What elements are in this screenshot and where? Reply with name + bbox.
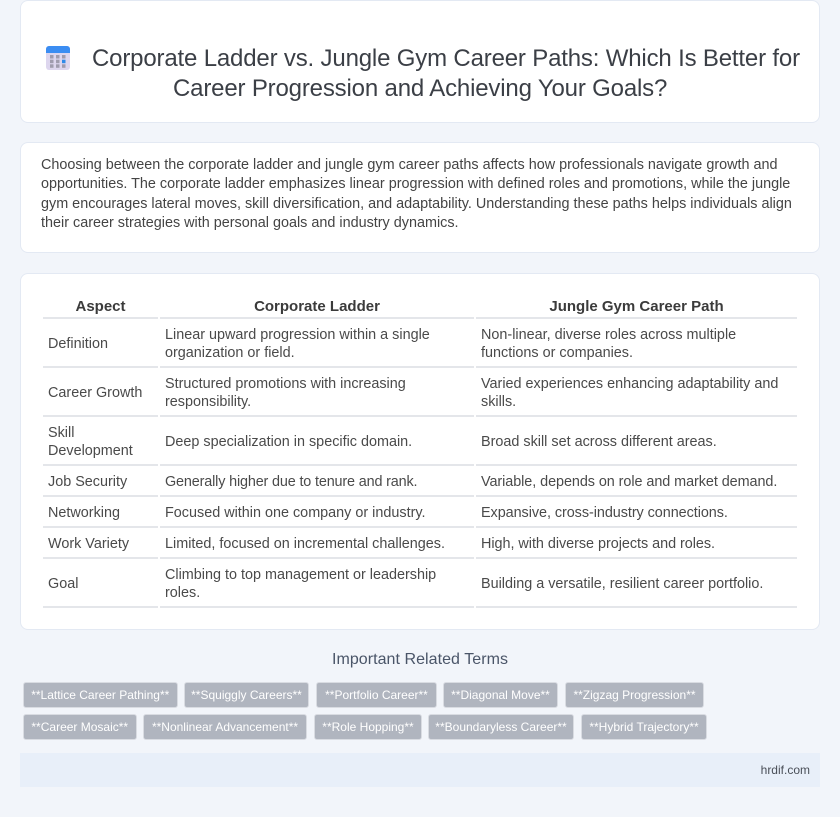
- intro text: opportunities. The corporate ladder emphasizes linear progression with defined roles and promotions, while the jungle: [41, 176, 790, 192]
- tag: **Boundaryless Career**: [435, 720, 567, 734]
- tag: **Zigzag Progression**: [573, 688, 696, 702]
- tag: [184, 682, 309, 708]
- row: definition: Definition: [48, 336, 108, 352]
- tag: **Nonlinear Advancement**: [152, 720, 298, 734]
- intro text: Choosing between the corporate ladder and jungle gym career paths affects how professionals navigate growth and: [41, 157, 778, 173]
- row: work variety: Work Variety: [48, 536, 129, 552]
- comparison table: Generally higher due to tenure and rank.: [165, 474, 417, 490]
- row: skill development: [48, 425, 133, 459]
- comparison table: Variable, depends on role and market demand.: [481, 474, 777, 490]
- tag: **Portfolio Career**: [325, 688, 428, 702]
- tag: **Squiggly Careers**: [191, 688, 302, 702]
- intro text: gym encourages lateral moves, skill diversification, and adaptability. Understanding these paths helps individuals align: [41, 196, 792, 212]
- row: career growth: Career Growth: [48, 385, 142, 401]
- tag: [316, 682, 437, 708]
- tag: [581, 714, 707, 740]
- intro text: [41, 157, 792, 231]
- tag: **Role Hopping**: [322, 720, 414, 734]
- comparison table: Limited, focused on incremental challenges.: [165, 536, 445, 552]
- comparison table: Structured promotions with increasing: [165, 376, 406, 392]
- comparison table: Non-linear, diverse roles across multiple: [481, 327, 736, 343]
- tag: **Hybrid Trajectory**: [589, 720, 699, 734]
- footer bar: [20, 753, 820, 787]
- tag: [428, 714, 574, 740]
- comparison table: organization or field.: [165, 345, 295, 361]
- row: skill development: Development: [48, 443, 133, 459]
- intro panel: [20, 142, 820, 253]
- comparison table: [43, 298, 797, 608]
- intro text: their career strategies with personal goals and industry dynamics.: [41, 215, 459, 231]
- title: [92, 45, 800, 102]
- comparison table: Expansive, cross-industry connections.: [481, 505, 728, 521]
- related terms heading: Important Related Terms: [332, 651, 508, 668]
- tag: [314, 714, 422, 740]
- row: job security: Job Security: [48, 474, 127, 490]
- header panel: [20, 0, 820, 123]
- row: networking: Networking: [48, 505, 120, 521]
- comparison table: responsibility.: [165, 394, 251, 410]
- comparison table: Varied experiences enhancing adaptability and: [481, 376, 778, 392]
- comparison table: roles.: [165, 585, 200, 601]
- tag: [565, 682, 704, 708]
- comparison table: Corporate Ladder: [254, 298, 380, 315]
- tag: **Career Mosaic**: [31, 720, 128, 734]
- tag: **Lattice Career Pathing**: [31, 688, 169, 702]
- comparison table: Climbing to top management or leadership: [165, 567, 436, 583]
- tag: [23, 682, 178, 708]
- comparison table: High, with diverse projects and roles.: [481, 536, 715, 552]
- title: Corporate Ladder vs. Jungle Gym Career Paths: Which Is Better for: [92, 45, 800, 72]
- tag: [23, 714, 136, 740]
- comparison table: Linear upward progression within a single: [165, 327, 430, 343]
- comparison table: Focused within one company or industry.: [165, 505, 426, 521]
- tag: [443, 682, 558, 708]
- tag: **Diagonal Move**: [451, 688, 550, 702]
- comparison table: skills.: [481, 394, 516, 410]
- table header: Aspect: [75, 298, 126, 315]
- comparison table: functions or companies.: [481, 345, 633, 361]
- footer source: hrdif.com: [761, 763, 810, 777]
- comparison table: Building a versatile, resilient career portfolio.: [481, 576, 763, 592]
- comparison table: Broad skill set across different areas.: [481, 434, 717, 450]
- table panel: [20, 273, 820, 630]
- comparison table: Deep specialization in specific domain.: [165, 434, 412, 450]
- row: goal: Goal: [48, 576, 78, 592]
- tag: [143, 714, 307, 740]
- icon: calendar: [46, 46, 70, 70]
- row: skill development: Skill: [48, 425, 74, 441]
- title: Career Progression and Achieving Your Goals?: [173, 75, 667, 102]
- comparison table: Jungle Gym Career Path: [549, 298, 724, 315]
